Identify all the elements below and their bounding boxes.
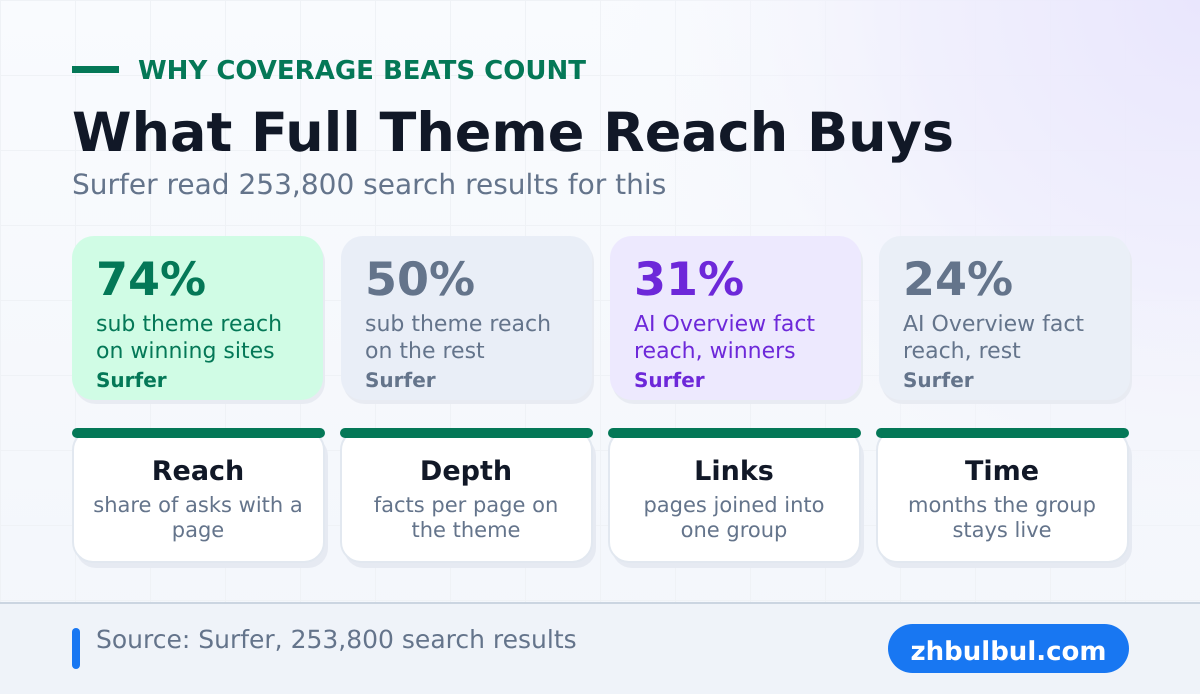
panel: Time: months the group xyxy=(908,493,1096,517)
panel: stat 50%: Surfer xyxy=(365,368,436,392)
panel: Reach xyxy=(72,428,328,568)
panel: stat 74% xyxy=(72,236,325,404)
panel: stat 50%: sub theme reach xyxy=(365,312,551,337)
panel: stat 31%: 31% xyxy=(634,252,744,306)
panel: stat 31%: AI Overview fact xyxy=(634,312,815,337)
panel: Links: Links xyxy=(694,456,774,487)
panel: stat 31% xyxy=(610,236,863,404)
panel: stat 74%: on winning sites xyxy=(96,339,275,364)
panel: Reach: page xyxy=(172,518,224,542)
panel: Depth: Depth xyxy=(420,456,512,487)
panel: stat 24%: 24% xyxy=(903,252,1013,306)
panel: stat 24%: Surfer xyxy=(903,368,974,392)
panel: Depth: facts per page on xyxy=(374,493,558,517)
panel: stat 74%: sub theme reach xyxy=(96,312,282,337)
panel: Links xyxy=(608,428,864,568)
panel: stat 74%: Surfer xyxy=(96,368,167,392)
brand pill: zhbulbul.com xyxy=(911,637,1106,667)
panel: stat 74%: 74% xyxy=(96,252,206,306)
panel: Reach: Reach xyxy=(152,456,244,487)
panel: Time: Time xyxy=(965,456,1039,487)
panel: stat 31%: reach, winners xyxy=(634,339,796,364)
panel: stat 50% xyxy=(341,236,594,404)
subtitle: Surfer read 253,800 search results for this xyxy=(72,168,666,201)
panel: stat 24% xyxy=(879,236,1132,404)
panel: stat 24%: AI Overview fact xyxy=(903,312,1084,337)
panel: stat 50%: 50% xyxy=(365,252,475,306)
brand pill xyxy=(888,624,1129,673)
panel: stat 31%: Surfer xyxy=(634,368,705,392)
panel: Time xyxy=(876,428,1132,568)
panel: Reach: share of asks with a xyxy=(93,493,303,517)
source note: Source: Surfer, 253,800 search results xyxy=(96,625,577,654)
panel: Depth xyxy=(340,428,596,568)
title: What Full Theme Reach Buys xyxy=(72,101,954,164)
footer band xyxy=(0,602,1200,694)
source note xyxy=(72,625,577,669)
panel: Links: pages joined into xyxy=(643,493,825,517)
eyebrow heading: WHY COVERAGE BEATS COUNT xyxy=(138,56,586,86)
panel: Depth: the theme xyxy=(412,518,520,542)
panel: Links: one group xyxy=(681,518,787,542)
panel: Time: stays live xyxy=(952,518,1052,542)
panel: stat 24%: reach, rest xyxy=(903,339,1021,364)
panel: stat 50%: on the rest xyxy=(365,339,485,364)
